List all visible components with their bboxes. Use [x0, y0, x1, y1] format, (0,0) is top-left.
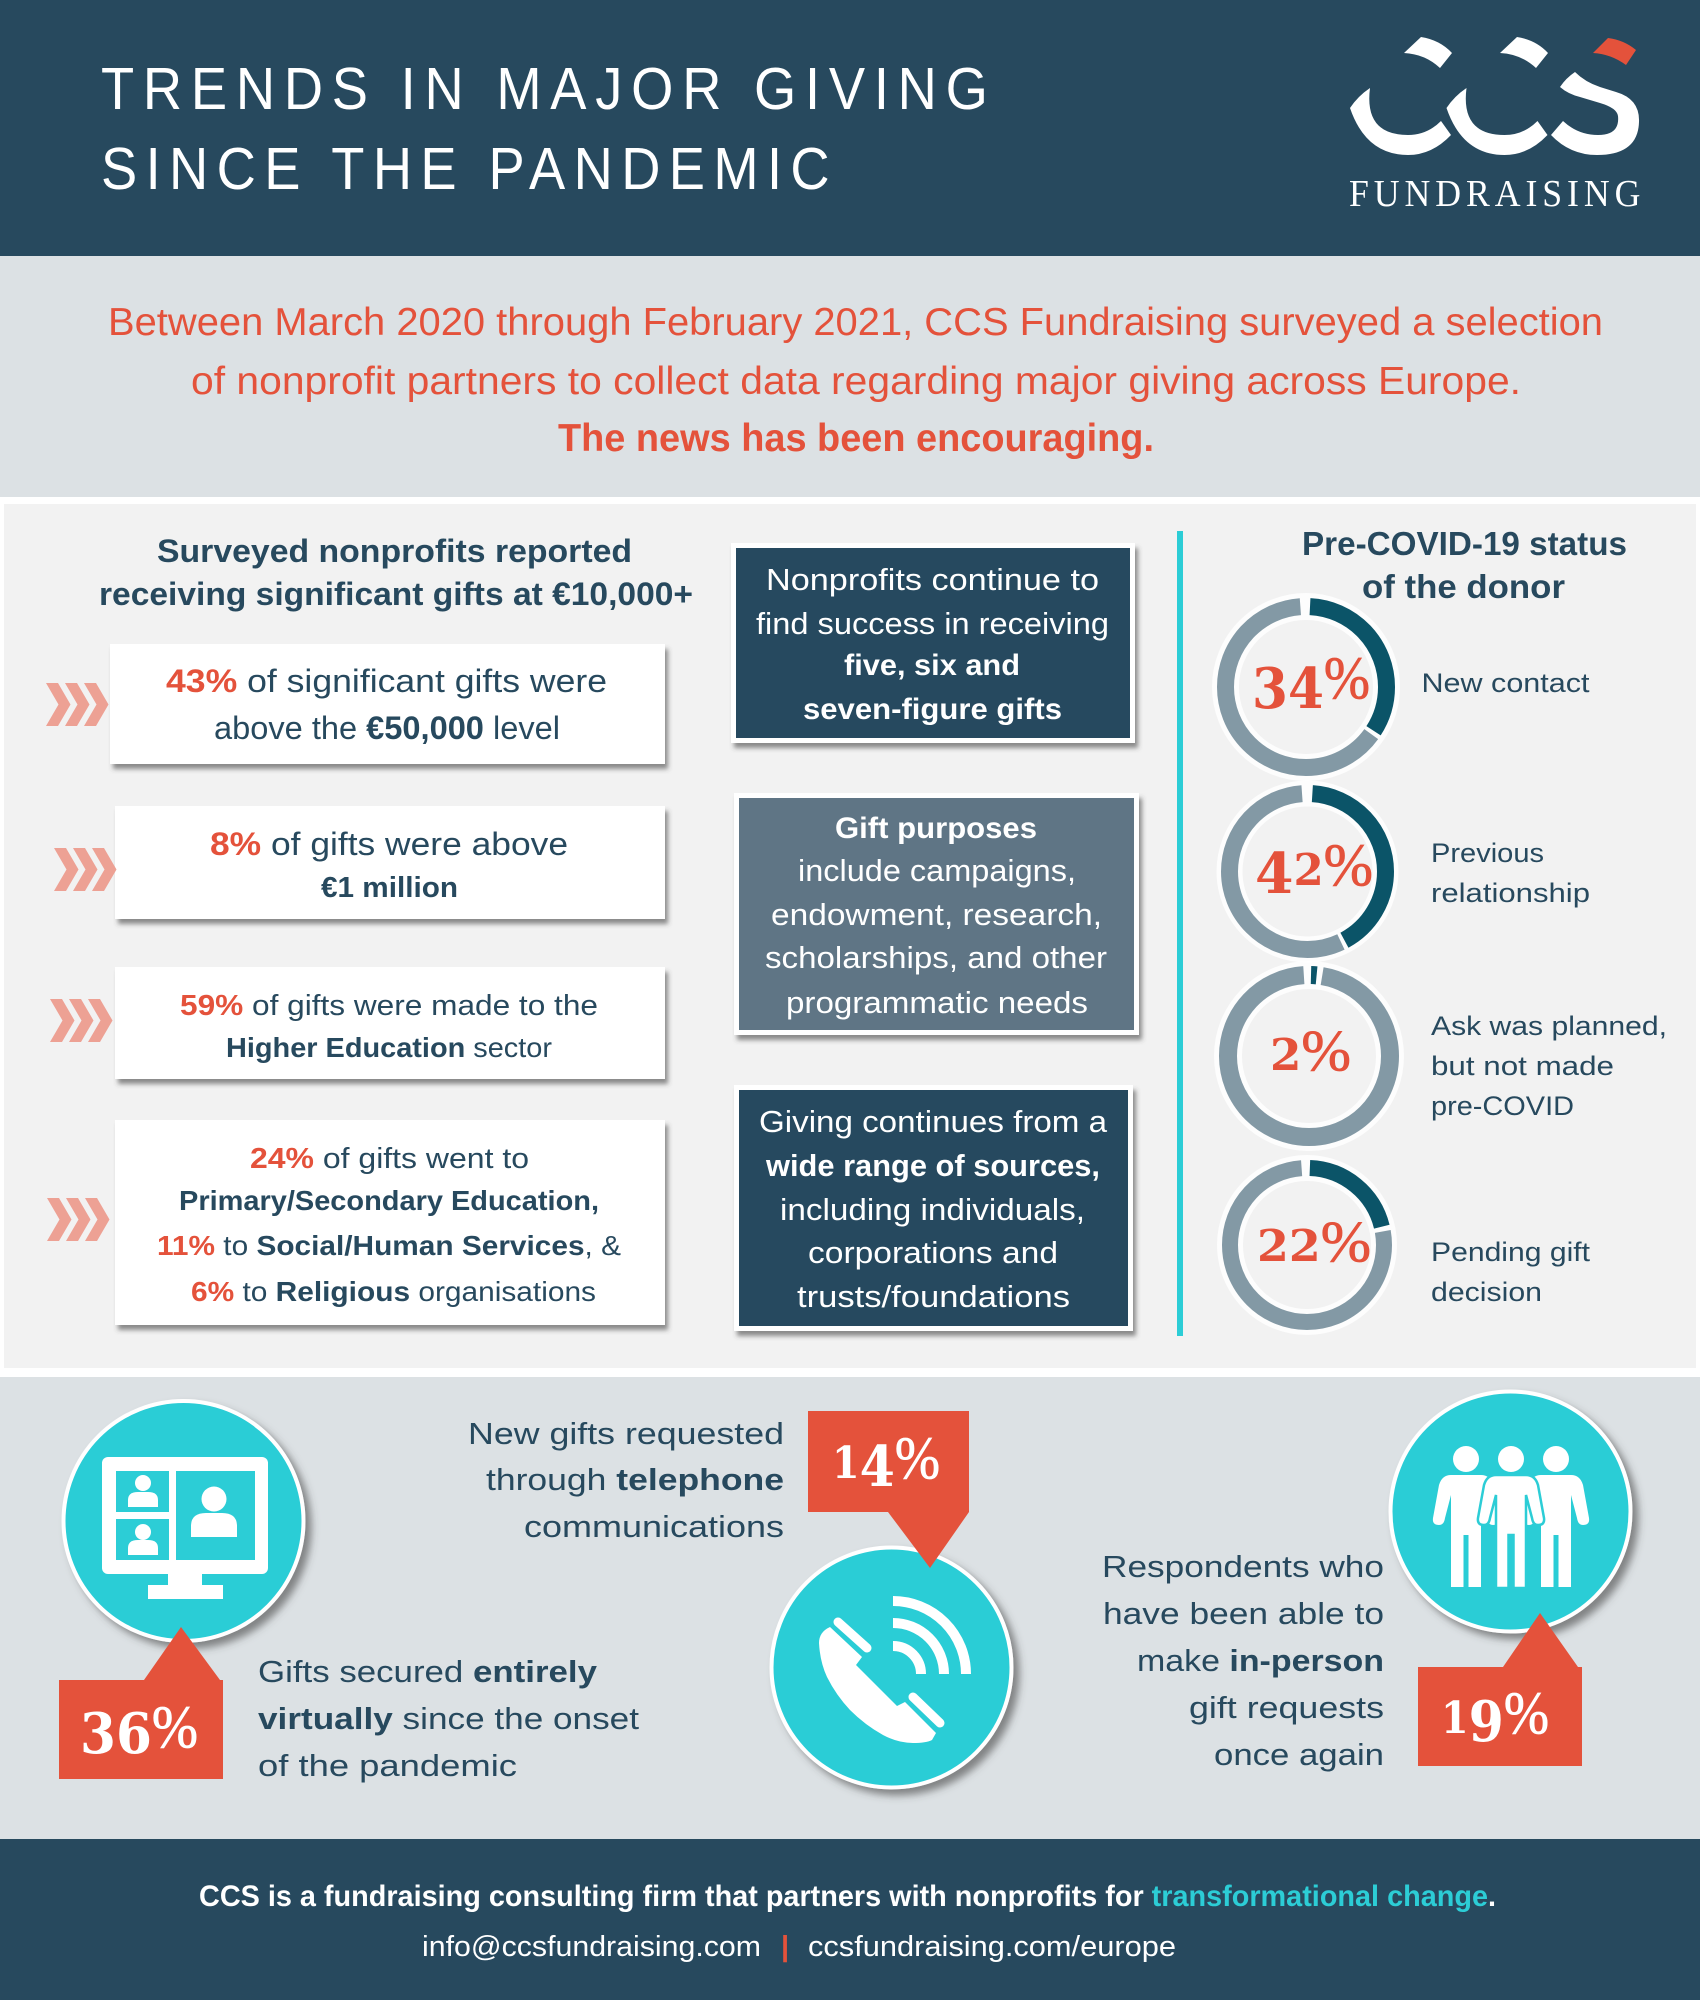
stat card: 59%: [50, 967, 665, 1079]
footer contacts: ccsfundraising.com/europe: [808, 1931, 1176, 1963]
footer: [0, 1839, 1700, 2000]
logo: CCS Fundraising: [1349, 37, 1640, 214]
callout: 14%: [808, 1411, 969, 1568]
box: range of sources: including individuals,: [780, 1192, 1085, 1227]
box: range of sources: wide range of sources,: [765, 1148, 1100, 1183]
box: five, six and seven-figure gifts: seven-figure gifts: [803, 693, 1062, 726]
icon: telephone: [772, 1548, 1012, 1788]
stat card: 24%, 11%, 6%: 6% to Religious organisations: [191, 1276, 596, 1307]
donut: 42% previous relationship: 4: [1255, 841, 1293, 907]
text: in-person requests: make in-person: [1137, 1643, 1384, 1678]
box: range of sources: [736, 1088, 1130, 1328]
intro text: Between March 2020 through February 2021, CCS Fundraising surveyed a selection: [108, 301, 1603, 344]
box: five, six and seven-figure gifts: [734, 546, 1132, 740]
stat card: 8%: [54, 806, 665, 919]
text: in-person requests: gift requests: [1189, 1690, 1384, 1725]
box: gift purposes: programmatic needs: [786, 985, 1088, 1020]
heading: donor status: of the donor: [1362, 568, 1565, 605]
icon: video call monitor: [64, 1401, 304, 1641]
text: telephone gifts: through telephone: [486, 1462, 784, 1497]
text: in-person requests: [1102, 1549, 1384, 1772]
footer contacts: |: [781, 1931, 789, 1963]
callout: 19%: [1418, 1613, 1582, 1766]
donut: 22% pending decision: Pending gift: [1431, 1237, 1591, 1267]
header band: [0, 0, 1700, 256]
text: telephone gifts: [468, 1416, 784, 1544]
heading: significant gifts: [99, 533, 693, 612]
heading: donor status: [1302, 525, 1627, 605]
donut: 22% pending decision: 22%: [1257, 1209, 1371, 1274]
donut: 2% ask planned: Ask was planned,: [1431, 1011, 1667, 1041]
intro band: [0, 256, 1700, 497]
callout: 19%: 1: [1441, 1693, 1469, 1744]
callout: 19%: 9: [1469, 1689, 1504, 1755]
panel: in-person requests: [1102, 1392, 1630, 1772]
box: range of sources: corporations and: [808, 1235, 1058, 1270]
box: five, six and seven-figure gifts: find success in receiving: [756, 606, 1109, 641]
title: SINCE THE PANDEMIC: [101, 137, 830, 203]
divider: [1177, 531, 1183, 1336]
intro text: The news has been encouraging.: [558, 417, 1154, 460]
box: gift purposes: [736, 796, 1136, 1032]
stat card: 43%: [46, 644, 665, 764]
heading: significant gifts: receiving significant gifts at €10,000+: [99, 576, 693, 612]
footer contacts: [422, 1931, 1176, 1963]
box: gift purposes: endowment, research,: [771, 897, 1102, 932]
text: virtual gifts: virtually since the onset: [258, 1701, 639, 1736]
footer statement: CCS is a fundraising consulting firm that partners with nonprofits for transformational change.: [199, 1880, 1496, 1913]
callout: 14%: 1: [832, 1438, 860, 1489]
box: range of sources: trusts/foundations: [797, 1279, 1070, 1314]
stat card: 59%: 59% of gifts were made to the: [180, 990, 598, 1022]
callout: 19%: %: [1504, 1680, 1549, 1746]
donut: 42% previous relationship: %: [1324, 832, 1373, 898]
text: in-person requests: Respondents who: [1102, 1549, 1384, 1584]
donut: 42% previous relationship: Previous: [1431, 838, 1544, 868]
text: virtual gifts: [258, 1654, 639, 1783]
donut: 42% previous relationship: relationship: [1431, 878, 1590, 908]
callout: 36%: %: [152, 1694, 198, 1760]
middle panel background: [4, 504, 1696, 1368]
callout: 14%: 4: [860, 1434, 895, 1500]
logo: CCS Fundraising: FUNDRAISING: [1349, 172, 1640, 214]
donut: 22% pending decision: [1230, 1168, 1591, 1322]
donut: 2% ask planned: but not made: [1431, 1051, 1614, 1081]
stat card: 59%: Higher Education sector: [226, 1032, 552, 1063]
stat card: 24%, 11%, 6%: 24% of gifts went to: [250, 1143, 529, 1175]
donut: 34% new contact: 34: [1252, 656, 1324, 722]
panel: telephone gifts: [468, 1411, 1012, 1788]
title: TRENDS IN MAJOR GIVING: [101, 57, 988, 123]
intro text: [108, 301, 1603, 460]
box: gift purposes: scholarships, and other: [765, 940, 1107, 975]
panel: virtual gifts: [59, 1401, 639, 1783]
text: telephone gifts: New gifts requested: [468, 1416, 784, 1451]
text: virtual gifts: Gifts secured entirely: [258, 1654, 598, 1689]
stat card: 8%: €1 million: [321, 872, 458, 904]
stat card: 24%, 11%, 6%: Primary/Secondary Education,: [179, 1185, 599, 1216]
panel: findings boxes: [734, 546, 1136, 1328]
callout: 36%: [59, 1627, 223, 1779]
heading: donor status: Pre-COVID-19 status: [1302, 525, 1627, 562]
donut: 42% previous relationship: [1230, 794, 1590, 950]
callout: 14%: %: [895, 1425, 940, 1491]
panel: donor status: [1226, 525, 1667, 1322]
intro text: of nonprofit partners to collect data regarding major giving across Europe.: [191, 360, 1521, 403]
panel: significant gifts: [46, 533, 693, 1325]
box: gift purposes: include campaigns,: [798, 853, 1076, 888]
donut: 34% new contact: %: [1324, 645, 1370, 711]
icon: group of people: [1390, 1392, 1630, 1632]
box: five, six and seven-figure gifts: Nonprofits continue to: [766, 562, 1099, 597]
heading: significant gifts: Surveyed nonprofits reported: [157, 533, 632, 569]
stat card: 43%: 43% of significant gifts were: [166, 663, 607, 699]
box: gift purposes: Gift purposes: [835, 812, 1037, 845]
donut: 22% pending decision: decision: [1431, 1277, 1542, 1307]
donut: 34% new contact: [1226, 606, 1590, 768]
callout: 36%: 36: [80, 1701, 152, 1767]
donut: 34% new contact: New contact: [1422, 668, 1590, 698]
bottom band: [0, 1377, 1700, 1839]
donut: 2% ask planned: [1228, 975, 1667, 1137]
stat card: 8%: 8% of gifts were above: [210, 826, 568, 862]
text: telephone gifts: communications: [524, 1509, 784, 1544]
donut: 2% ask planned: pre-COVID: [1431, 1091, 1574, 1121]
stat card: 43%: above the €50,000 level: [214, 710, 560, 746]
text: virtual gifts: of the pandemic: [258, 1748, 517, 1783]
donut: 42% previous relationship: 2: [1293, 845, 1324, 896]
text: in-person requests: once again: [1214, 1737, 1384, 1772]
stat card: 24%, 11%, 6%: [47, 1120, 665, 1325]
text: in-person requests: have been able to: [1103, 1596, 1384, 1631]
box: range of sources: Giving continues from a: [759, 1104, 1108, 1139]
box: five, six and seven-figure gifts: five, six and: [844, 649, 1020, 682]
footer contacts: info@ccsfundraising.com: [422, 1931, 761, 1963]
stat card: 24%, 11%, 6%: 11% to Social/Human Services , &: [157, 1230, 621, 1261]
title: [101, 57, 988, 203]
donut: 2% ask planned: 2%: [1270, 1018, 1351, 1083]
